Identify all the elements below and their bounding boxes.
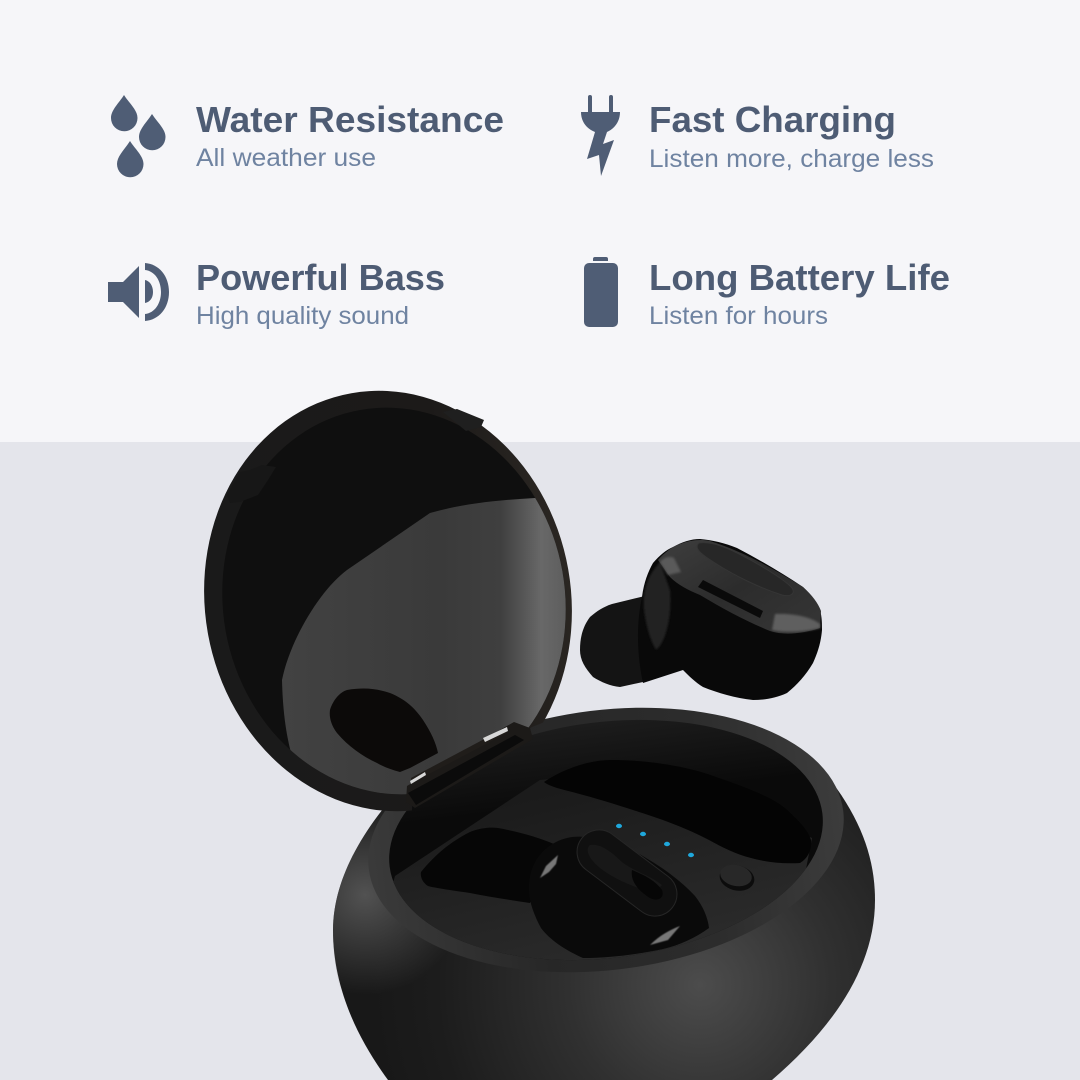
rear earbud slot [544,760,811,863]
heading: fast charging: Fast Charging [649,99,896,140]
lid clip left [248,466,266,494]
earbud vent [698,580,763,618]
icon: plug with bolt [581,95,620,176]
earbud touch panel [568,821,686,925]
lid clip right [455,409,484,431]
heading: long battery life: Long Battery Life [649,257,950,298]
earbud cap [658,540,821,634]
lid hinge [406,722,533,808]
reflection highlight [282,498,566,794]
icon: water drops [111,95,166,177]
text: all weather use: All weather use [196,144,376,172]
earbud light bands [772,614,820,632]
icon: battery [584,257,618,327]
seated earbud [529,821,709,958]
earbud side sheen [644,562,670,650]
case rim [353,682,859,998]
icon: speaker [108,263,169,321]
earbud body [638,539,822,700]
earbud touch panel [697,543,793,596]
text: listen for hours: Listen for hours [649,302,828,330]
background: lower panel [0,442,1080,1080]
earbud reflection in lid [330,689,438,772]
front earbud slot [421,828,554,903]
product: floating earbud [580,539,822,700]
case button [717,862,757,894]
feature: fast charging [581,95,934,176]
feature: powerful bass [108,257,445,330]
text: listen more, charge less: Listen more, charge less [649,145,934,173]
product: charging case body [333,682,875,1080]
background: upper panel [0,0,1080,442]
lid interior reflection [282,498,566,794]
charge indicator lights [616,824,694,857]
earbud highlights [540,855,680,945]
lid outer rim [204,390,572,812]
case outer shell [333,750,875,1080]
lid inner surface [222,408,535,750]
heading: powerful bass: Powerful Bass [196,257,445,298]
heading: water resistance: Water Resistance [196,99,504,140]
feature: long battery life [584,257,950,330]
case inner wall [375,696,837,984]
case platform and slots [394,760,812,960]
text: high quality sound: High quality sound [196,302,409,330]
ear tip [580,596,665,687]
feature: water resistance [111,95,504,177]
product: open lid [204,390,572,812]
